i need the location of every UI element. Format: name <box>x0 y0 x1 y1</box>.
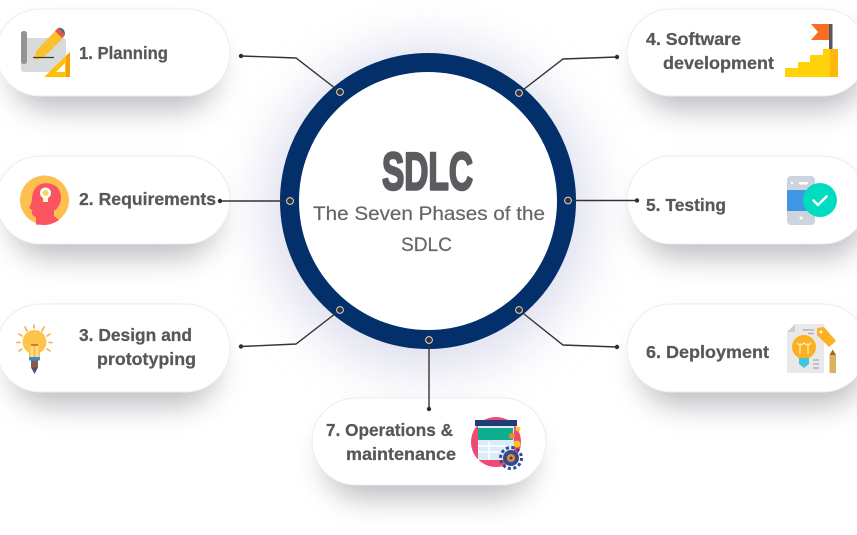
panel: 7. Operations & maintenance <box>312 398 546 485</box>
icon: lightbulb pencil <box>17 325 52 374</box>
label: 3. Design and prototyping: prototyping <box>97 349 196 369</box>
connector: 7. Operations & maintenance <box>426 337 432 411</box>
connector: 3. Design and prototyping <box>239 307 343 349</box>
circle glow <box>263 43 593 373</box>
icon: blueprint with pencil and set square <box>21 28 70 77</box>
subtitle: The Seven Phases of the <box>313 203 545 225</box>
panel: 3. Design and prototyping <box>0 304 230 392</box>
title: SDLC: SDLC <box>382 142 473 202</box>
connector: 2. Requirements <box>218 198 293 204</box>
label: 1. Planning: 1. Planning <box>79 43 168 63</box>
panel: 1. Planning <box>0 9 230 96</box>
label: 7. Operations & maintenance: maintenance <box>346 444 456 464</box>
label: 4. Software development: development <box>663 53 774 73</box>
icon: head with lightbulb <box>20 176 69 225</box>
label: 4. Software development: 4. Software <box>646 29 741 49</box>
panel: 5. Testing <box>627 156 857 244</box>
label: 3. Design and prototyping: 3. Design and <box>79 325 192 345</box>
connector: 6. Deployment <box>516 307 619 349</box>
panel: 2. Requirements <box>0 156 230 244</box>
connector: 1. Planning <box>239 54 343 95</box>
label: 4. Software development <box>646 29 774 73</box>
subtitle <box>313 203 545 256</box>
connector: 5. Testing <box>565 197 639 204</box>
subtitle: SDLC <box>401 234 452 256</box>
central ring <box>290 62 566 340</box>
icon: browser window with gear <box>471 417 522 468</box>
label: 3. Design and prototyping <box>79 325 196 369</box>
icon: document, bulb, tag and pencil <box>787 324 836 373</box>
connector: 4. Software development <box>516 55 619 96</box>
panel: 4. Software development <box>627 9 857 96</box>
icon: stairs with flag <box>785 24 838 77</box>
icon: phone with check badge <box>787 176 837 225</box>
label: 6. Deployment: 6. Deployment <box>646 342 769 362</box>
label: 7. Operations & maintenance <box>326 420 456 464</box>
label: 5. Testing: 5. Testing <box>646 195 726 215</box>
label: 7. Operations & maintenance: 7. Operations & <box>326 420 453 440</box>
panel: 6. Deployment <box>627 304 857 392</box>
label: 2. Requirements: 2. Requirements <box>79 189 216 209</box>
